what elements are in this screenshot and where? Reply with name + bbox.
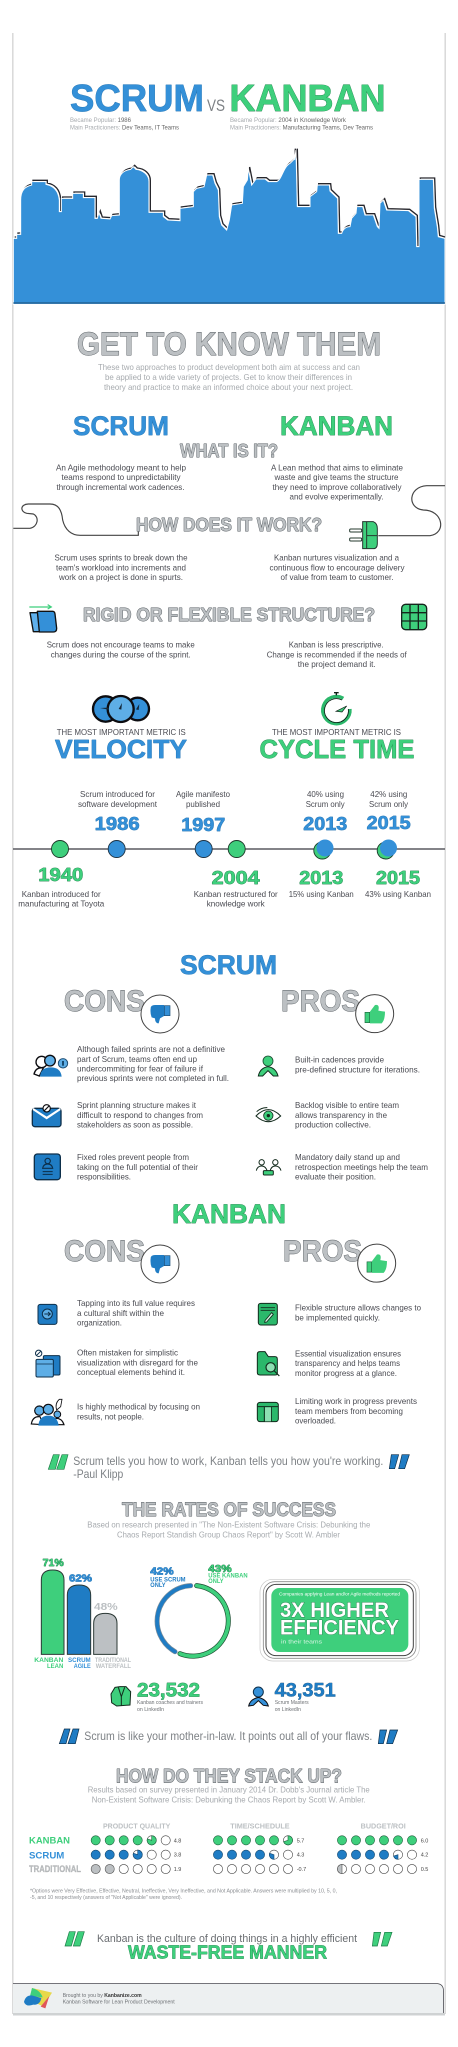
text: kanban con 2: Often mistaken for simplistic [77,1348,178,1358]
timeline event: 2013 scrum: 2013 [303,814,347,834]
icon: scrum thumbs down [141,995,179,1033]
icon: cycle time stopwatch [323,693,350,724]
heading: get to know them: GET TO KNOW THEM [77,326,381,362]
text: scrum con 1 [77,1044,229,1083]
icon: scrum master [249,1687,268,1706]
stat: kanban coaches: on LinkedIn [137,1707,164,1713]
text: scrum how it works: work on a project is done in spurts. [58,572,183,582]
text: kanban structure: Change is recommended if the needs of [267,650,407,660]
rating chart: time and schedule: TIME/SCHEDULE [230,1823,290,1830]
rating chart: product quality: PRODUCT QUALITY [103,1823,171,1830]
rating chart: budget and roi [337,1823,428,1874]
timeline event: 2013 scrum [303,789,347,834]
text: kanban definition: and evolve experimentally. [290,492,384,502]
text: kanban pro 2: monitor progress at a glance. [295,1368,397,1378]
timeline event: 1986: software development [78,799,158,809]
title: Scrum vs Kanban [70,78,386,120]
heading: kanban column: KANBAN [280,411,393,441]
title: Scrum vs Kanban: KANBAN [230,78,386,120]
timeline event: 2013 kanban [289,840,354,899]
icon: fixed role badge [34,1154,60,1180]
callout: 3x higher efficiency: Companies applying Lean and/or Agile methods reported [279,1592,400,1597]
text: scrum pro 1: pre-defined structure for iterations. [295,1064,420,1074]
heading: velocity: VELOCITY [55,734,187,764]
heading: rigid or flexible structure: RIGID OR FLEXIBLE STRUCTURE? [83,605,375,625]
text: intro [98,362,360,392]
text: scrum pro 3: Mandatory daily stand up and [295,1152,400,1162]
donut chart: method usage: ONLY [150,1583,166,1589]
stat: scrum masters: on LinkedIn [275,1707,301,1713]
rating chart: budget and roi: BUDGET/ROI [361,1823,406,1830]
text: scrum how it works [54,553,188,582]
icon: notebook and pencil [258,1303,277,1325]
text: footer credit [63,1993,175,2006]
rating chart: time and schedule [213,1823,306,1874]
text: kanban con 3: Is highly methodical by focusing on [77,1402,200,1412]
icon: folder with magnifier [257,1352,279,1376]
text: kanban pro 3: Limiting work in progress prevents [295,1396,417,1406]
donut chart: method usage: USE KANBAN [208,1574,248,1580]
row labels: methods: SCRUM [29,1850,64,1860]
text: scrum con 1: part of Scrum, teams often end up [77,1054,197,1064]
text: survey source: Results based on survey presented in January 2014 Dr. Dobb's Journal article The [88,1785,370,1795]
text: scrum pro 2: Backlog visible to entire team [295,1100,399,1110]
row labels: methods: KANBAN [29,1836,70,1846]
row labels: methods: TRADITIONAL [29,1864,81,1874]
text: survey source: Non-Existent Software Crisis: Debunking the Chaos Report by Scott W. Ambler. [92,1794,366,1804]
icon: scrum person [258,1056,278,1076]
timeline event: 2015 scrum: 42% using [370,789,408,799]
timeline event: 1986 [78,789,158,858]
text: footnote: -5, and 10 respectively (answers of "Not Applicable" were ignored). [30,1895,182,1901]
timeline event: 2015 scrum: 2015 [367,813,411,833]
row labels: methods [29,1836,81,1874]
timeline event: 2015 scrum [367,789,411,833]
text: kanban pro 2: Essential visualization ensures [295,1348,401,1358]
text: kanban con 3: results, not people. [77,1412,144,1422]
text: kanban con 1: Tapping into its full value requires [77,1298,195,1308]
text: scrum definition: through incremental work cadences. [56,482,184,492]
timeline event: 1986: Scrum introduced for [80,789,155,799]
timeline event: 1997 [176,789,230,858]
icon: scrum thumbs up [356,995,394,1033]
text: kanban metric label: THE MOST IMPORTANT METRIC IS [272,727,401,737]
text: kanban con 2 [77,1348,198,1377]
text: kanban pro 3: overloaded. [295,1416,336,1426]
text: scrum facts: Main Practicioners: Dev Teams, IT Teams [70,124,180,132]
rating chart: time and schedule: 5.7 [297,1838,304,1844]
heading: scrum column: SCRUM [73,411,169,441]
text: research source: Chaos Report Standish Group Chaos Report" by Scott W. Ambler [117,1530,340,1540]
text: scrum con 3: Fixed roles prevent people from [77,1152,189,1162]
callout: 3x higher efficiency: 3X HIGHER [280,1598,389,1622]
text: kanban structure [267,640,407,669]
text: kanban con 1 [77,1298,195,1328]
quote: waste-free manner: WASTE-FREE MANNER [128,1942,327,1962]
rating chart: product quality: 1.9 [174,1867,181,1873]
rating chart: budget and roi: 6.0 [421,1838,428,1844]
stat: scrum masters: 43,351 [275,1681,336,1702]
text: scrum facts: Became Popular: 1986 [70,117,131,124]
timeline event: 2004: knowledge work [207,898,265,908]
icon: cultural shift [38,1304,57,1324]
text: footer credit: Brought to you by Kanbanize.com [63,1993,142,1999]
heading: how do they stack up: HOW DO THEY STACK UP? [116,1766,342,1787]
text: kanban pro 1 [295,1303,421,1322]
callout: 3x higher efficiency: EFFICIENCY [280,1616,399,1640]
stat: scrum masters [275,1681,336,1713]
bar chart: success rates: TRADITIONAL [95,1658,131,1664]
icon: pages [35,1350,60,1377]
text: kanban definition [271,462,403,502]
text: scrum con 1: previous sprints were not completed in full. [77,1073,229,1083]
heading: scrum pros: PROS [281,985,360,1018]
text: kanban pro 3 [295,1396,417,1426]
rating chart: product quality [91,1823,181,1874]
bar chart: success rates: LEAN [47,1664,63,1670]
timeline event: 1997: 1997 [181,815,225,835]
text: scrum pro 2: allows transparency in the [295,1110,387,1120]
quote: paul klipp [48,1454,409,1481]
timeline event: 1940: manufacturing at Toyota [18,898,105,908]
stat: scrum masters: Scrum Masters [275,1700,309,1706]
text: scrum con 2 [77,1100,203,1130]
icon: velocity gauges [93,696,149,722]
icon: blocked envelope [32,1105,61,1127]
text: intro: These two approaches to product development both aim at success and can [98,362,360,372]
timeline event: 2004: 2004 [212,868,260,888]
heading: kanban pros and cons: KANBAN [172,1199,286,1229]
timeline event: 2015 kanban [365,840,431,899]
heading: kanban cons: CONS [64,1235,145,1268]
text: scrum pro 1 [295,1055,420,1074]
stat: kanban coaches: 23,532 [137,1681,200,1702]
bar chart: success rates: KANBAN [34,1658,63,1664]
text: kanban pro 1: be implemented quickly. [295,1312,380,1322]
text: kanban pro 2: transparency and helps teams [295,1358,400,1368]
timeline event: 1940: Kanban introduced for [22,889,101,899]
quote: mother-in-law: Scrum is like your mother-in-law. It points out all of your flaws. [84,1729,372,1743]
text: scrum how it works: team's workload into increments and [56,562,186,572]
icon: kanban thumbs down [141,1245,179,1283]
text: scrum how it works: Scrum uses sprints to break down the [54,553,188,563]
text: scrum pro 3: evaluate their position. [295,1172,376,1182]
heading: kanban pros: PROS [283,1235,362,1268]
text: kanban con 1: a cultural shift within the [77,1308,164,1318]
heading: how does it work: HOW DOES IT WORK? [136,515,322,535]
bar chart: success rates: WATERFALL [96,1664,131,1670]
text: kanban facts [230,117,374,132]
text: kanban pro 2 [295,1348,401,1378]
text: scrum structure: Scrum does not encourage teams to make [47,640,195,650]
text: kanban con 1: organization. [77,1318,122,1328]
text: kanban how it works [270,553,405,582]
text: kanban how it works: of value from team to customer. [280,572,394,582]
quote: waste-free manner: Kanban is the culture of doing things in a highly efficient [97,1933,357,1945]
text: kanban con 2: visualization with disregard for the [77,1358,198,1368]
icon: group of people [31,1399,64,1426]
timeline event: 2015 kanban: 2015 [376,868,420,888]
icon: kanban coach [111,1687,131,1706]
text: kanban facts: Main Practicioners: Manufacturing Teams, Dev Teams [230,124,374,132]
rating chart: time and schedule: 4.3 [297,1853,304,1859]
text: scrum definition: An Agile methodology meant to help [56,462,186,472]
heading: rates of success: THE RATES OF SUCCESS [122,1500,336,1521]
skyline illustration [13,149,445,304]
text: intro: be applied to a wide variety of projects. Get to know their differences in [105,372,352,382]
heading: cycle time: CYCLE TIME [260,734,414,764]
donut chart: method usage: 43% [208,1564,232,1575]
bar chart: success rates: 48% [94,1602,118,1613]
timeline event: 1997: Agile manifesto [176,789,230,799]
timeline event: 1940: 1940 [38,865,83,885]
text: kanban con 2: conceptual elements behind it. [77,1367,185,1377]
timeline event: 2015 scrum: Scrum only [369,799,409,809]
timeline chart [13,789,445,908]
stat: kanban coaches: Kanban coaches and trainers [137,1700,203,1706]
title: Scrum vs Kanban: VS [207,96,225,115]
icon: kanban thumbs up [358,1244,396,1282]
text: footer credit: Kanban Software for Lean Product Development [63,2000,175,2006]
callout: 3x higher efficiency: in their teams [281,1640,322,1646]
text: survey source [88,1785,370,1804]
rating chart: budget and roi: 4.2 [421,1853,428,1859]
icon: stand up meeting [256,1160,281,1175]
text: scrum con 2: stakeholders as soon as possible. [77,1120,193,1130]
heading: scrum pros and cons: SCRUM [180,950,277,980]
bar chart: success rates: SCRUM [68,1658,91,1664]
icon: flexible grid [402,604,427,630]
timeline event: 2013 kanban: 2013 [299,868,343,888]
text: scrum pro 2 [295,1100,399,1130]
quote: paul klipp: Scrum tells you how to work, Kanban tells you how you're working. [73,1454,383,1468]
bar chart: success rates [34,1558,131,1670]
text: kanban how it works: continuous flow to encourage delivery [270,562,405,572]
text: scrum facts [70,117,180,132]
rating chart: time and schedule: -0.7 [297,1867,306,1873]
donut chart: method usage: 42% [150,1566,174,1577]
text: scrum con 1: Although failed sprints are not a definitive [77,1044,225,1054]
text: footnote [30,1888,337,1901]
timeline event: 1940 [18,840,105,908]
text: scrum con 3: responsibilities. [77,1172,131,1182]
bar chart: success rates: 62% [69,1573,92,1584]
icon: team fear [34,1055,68,1077]
icon: rigid sprint cards [29,605,57,632]
timeline event: 2004: Kanban restructured for [194,889,278,899]
icon: kanbanize logo [24,1988,52,2008]
text: scrum con 3 [77,1152,198,1182]
heading: scrum cons: CONS [64,985,145,1018]
timeline event: 2013 kanban: 15% using Kanban [289,889,354,899]
text: kanban facts: Became Popular: 2004 in Knowledge Work [230,117,347,124]
icon: eye [256,1108,281,1122]
text: scrum con 2: Sprint planning structure makes it [77,1100,197,1110]
text: kanban how it works: Kanban nurtures visualization and a [274,553,399,563]
text: kanban pro 3: team members from becoming [295,1406,403,1416]
text: scrum structure [47,640,195,660]
text: research source [87,1520,371,1540]
timeline event: 1997: published [186,799,220,809]
panel: footer [13,1984,445,2016]
text: intro: theory and practice to make an informed choice about your next project. [104,382,353,392]
rating chart: budget and roi: 0.5 [421,1867,428,1873]
text: scrum pro 1: Built-in cadences provide [295,1055,384,1065]
heading: what is it: WHAT IS IT? [180,441,278,461]
text: kanban definition: A Lean method that aims to eliminate [271,462,403,472]
text: scrum definition [56,462,186,492]
text: kanban pro 1: Flexible structure allows changes to [295,1303,421,1313]
donut chart: method usage [150,1564,248,1656]
callout: 3x higher efficiency [260,1579,419,1661]
stat: kanban coaches [137,1681,203,1713]
text: kanban structure: the project demand it. [298,659,376,669]
text: scrum metric label: THE MOST IMPORTANT METRIC IS [57,727,186,737]
timeline event: 2013 scrum: Scrum only [306,799,345,809]
text: scrum pro 3 [295,1152,428,1182]
bar chart: success rates: AGILE [74,1664,91,1670]
timeline event: 1986: 1986 [95,814,140,834]
text: kanban definition: waste and give teams the structure [274,472,399,482]
icon: plug cable [13,486,445,549]
text: scrum pro 2: production collective. [295,1120,371,1130]
text: scrum con 2: difficult to respond to changes from [77,1110,203,1120]
text: scrum structure: changes during the course of the sprint. [51,650,191,660]
quote: waste-free manner [65,1932,392,1962]
title: Scrum vs Kanban: SCRUM [70,78,204,120]
bar chart: success rates: 71% [43,1558,64,1569]
quote: paul klipp: -Paul Klipp [73,1467,124,1481]
donut chart: method usage: USE SCRUM [150,1578,186,1584]
donut chart: method usage: ONLY [208,1579,224,1585]
timeline event: 2004 [194,840,278,908]
text: scrum pro 3: retrospection meetings help the team [295,1162,428,1172]
text: scrum definition: teams respond to unpredictability [62,472,181,482]
rating chart: product quality: 4.8 [174,1838,181,1844]
timeline event: 2013 scrum: 40% using [307,789,344,799]
rating chart: product quality: 3.8 [174,1853,181,1859]
text: research source: Based on research presented in "The Non-Existent Software Crisis: Debunking the [87,1520,371,1530]
timeline event: 2015 kanban: 43% using Kanban [365,889,431,899]
text: kanban definition: they need to improve collaboratively [272,482,402,492]
text: scrum con 3: taking on the full potential of their [77,1162,198,1172]
icon: work in progress board [257,1402,278,1422]
text: scrum con 1: undercommiting for fear of failure if [77,1064,204,1074]
text: footnote: *Options were Very Effective, Effective, Neutral, Ineffective, Very Ineffective, and Not Applicable. Answers were multiplied by 10, 5, 0, [30,1888,337,1894]
text: kanban con 3 [77,1402,200,1422]
text: kanban structure: Kanban is less prescriptive. [289,640,384,650]
